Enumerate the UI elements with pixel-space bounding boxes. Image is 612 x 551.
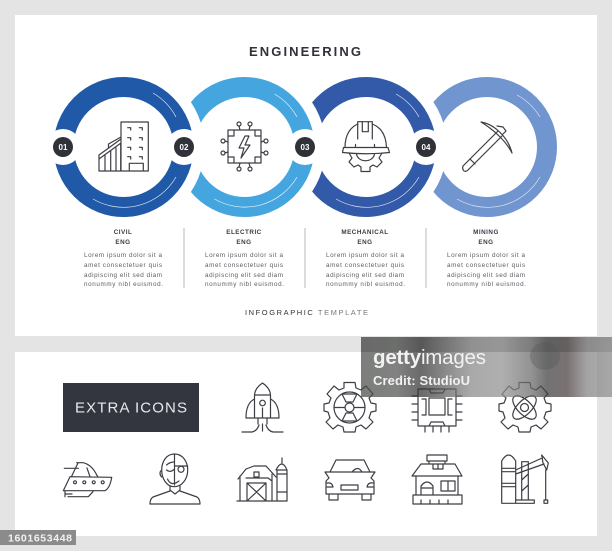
badge 04 <box>408 129 444 165</box>
watermark: gettyimages credit <box>361 337 612 397</box>
text: mechanical eng: Lorem ipsum dolor sit a <box>326 252 404 259</box>
text: mechanical eng: adipiscing elit sed diam <box>326 272 404 279</box>
image id tag: 1601653448 <box>8 532 72 544</box>
divider <box>184 228 426 288</box>
text: mining eng: Lorem ipsum dolor sit a <box>447 252 525 259</box>
text: mining eng: nonummy nibl euismod. <box>447 281 526 288</box>
icon: barn and silo <box>237 458 287 501</box>
chart: four linked rings <box>42 66 547 228</box>
text: mining eng: ENG <box>478 239 494 246</box>
text: civil eng: ENG <box>115 239 131 246</box>
badge 01 <box>45 129 81 165</box>
text: civil eng: adipiscing elit sed diam <box>84 272 162 279</box>
icon: buildings <box>99 122 148 171</box>
text: civil eng: amet consectetuer quis <box>84 262 162 269</box>
text: mining eng: MINING <box>473 229 499 236</box>
text: mechanical eng: MECHANICAL <box>341 229 389 236</box>
text: mechanical eng <box>326 229 405 288</box>
watermark: gettyimages credit: Credit: StudioU <box>373 373 470 388</box>
icon: microchip <box>412 389 462 432</box>
icon: boat <box>63 463 112 497</box>
icon: gear with atom <box>499 382 551 432</box>
panel: extra icons <box>15 352 597 536</box>
text: electric eng <box>205 229 284 288</box>
icon: rocket <box>242 383 283 432</box>
text: mechanical eng: amet consectetuer quis <box>326 262 404 269</box>
extra icons label <box>63 383 199 432</box>
text: mining eng: adipiscing elit sed diam <box>447 272 525 279</box>
text: mechanical eng: ENG <box>357 239 373 246</box>
badge 02: 02 <box>180 143 189 152</box>
text: civil eng: nonummy nibl euismod. <box>84 281 163 288</box>
image id tag <box>0 530 76 545</box>
watermark: gettyimages credit: gettyimages <box>373 346 486 369</box>
text: civil eng: Lorem ipsum dolor sit a <box>84 252 162 259</box>
icon: gear with radial <box>324 382 376 432</box>
text: electric eng: ENG <box>236 239 252 246</box>
badge 03 <box>287 129 323 165</box>
icon: half robot face person <box>150 454 200 504</box>
text: civil eng <box>84 229 163 288</box>
ring 2 <box>164 66 326 228</box>
ring 3 <box>285 66 447 228</box>
ring 4 <box>427 87 547 207</box>
badge 03: 03 <box>301 143 310 152</box>
text: electric eng: ELECTRIC <box>226 229 262 236</box>
text: electric eng: nonummy nibl euismod. <box>205 281 284 288</box>
badge 04: 04 <box>422 143 431 152</box>
text: electric eng: amet consectetuer quis <box>205 262 283 269</box>
icon: pumpjack <box>502 455 548 503</box>
text: electric eng: adipiscing elit sed diam <box>205 272 283 279</box>
title: ENGINEERING <box>249 44 361 59</box>
icon: car <box>325 460 375 500</box>
icon: house <box>412 455 462 504</box>
text: mining eng <box>447 229 526 288</box>
badge 01: 01 <box>59 143 68 152</box>
ring 1 <box>42 66 204 228</box>
text: electric eng: Lorem ipsum dolor sit a <box>205 252 283 259</box>
icon: pickaxe <box>463 122 512 171</box>
text: civil eng: CIVIL <box>114 229 132 236</box>
text: mechanical eng: nonummy nibl euismod. <box>326 281 405 288</box>
panel: engineering infographic <box>15 15 597 336</box>
footer label: INFOGRAPHIC TEMPLATE <box>245 308 368 317</box>
icon: hard hat and gear <box>342 122 390 172</box>
icon: circuit chip with bolt <box>221 122 268 171</box>
extra icons label: EXTRA ICONS <box>75 400 187 416</box>
text: mining eng: amet consectetuer quis <box>447 262 525 269</box>
badge 02 <box>166 129 202 165</box>
